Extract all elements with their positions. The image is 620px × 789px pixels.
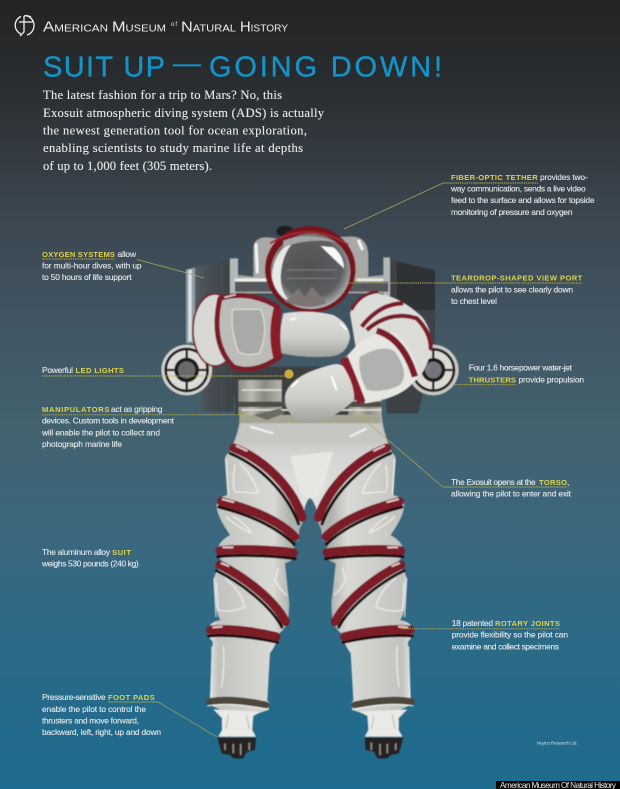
left outer sphere — [193, 294, 237, 366]
callout: fiber-optic tether: monitoring of pressure and oxygen — [451, 207, 573, 217]
belly — [238, 423, 383, 443]
callout: foot pads: Pressure-sensitive — [42, 692, 106, 702]
helmet collar — [265, 226, 356, 313]
left shoulder sphere — [217, 296, 280, 369]
waist bands — [235, 367, 382, 415]
callout: teardrop view port: to chest level — [451, 296, 497, 306]
intro text — [43, 88, 325, 173]
right arm — [253, 292, 431, 423]
helmet — [265, 226, 356, 313]
crotch panel — [290, 452, 333, 497]
right tank — [383, 257, 435, 413]
title — [43, 52, 442, 84]
leader: view port — [345, 282, 582, 284]
callout: fiber-optic tether: provides two- — [540, 172, 588, 182]
callout: teardrop view port: allows the pilot to see clearly down — [451, 284, 573, 294]
intro text: the newest generation tool for ocean exploration, — [43, 124, 307, 138]
callout: oxygen systems: for multi-hour dives, with up — [42, 261, 142, 271]
callout: torso: allowing the pilot to enter and exit — [451, 489, 572, 499]
right upper capsule — [350, 293, 431, 392]
callout: foot pads: FOOT PADS — [108, 693, 155, 702]
callout: oxygen systems — [42, 249, 142, 282]
suit upper body — [161, 226, 459, 443]
callout: torso: TORSO — [539, 478, 567, 487]
glass reflections — [272, 241, 295, 302]
underline: fiber — [451, 182, 538, 184]
callout: suit — [41, 547, 139, 569]
museum name: Natural — [181, 20, 236, 36]
callout: oxygen systems: OXYGEN SYSTEMS — [42, 250, 115, 259]
right thruster housing — [408, 345, 459, 395]
leader: foot pads — [108, 702, 217, 737]
left tank — [185, 257, 238, 412]
leader: torso — [353, 410, 567, 487]
callout: LED lights — [42, 365, 124, 375]
left leg — [207, 446, 305, 758]
callout: foot pads: enable the pilot to control the — [42, 704, 146, 714]
leg shell — [207, 452, 305, 737]
pelvis — [230, 415, 392, 515]
callout: foot pads — [42, 692, 161, 737]
callout: foot pads: backward, left, right, up and down — [42, 727, 161, 737]
leader: fiber-optic tether — [344, 183, 451, 229]
museum name: of — [171, 22, 177, 28]
rear frame — [238, 237, 383, 293]
ankle ring — [209, 700, 266, 705]
museum name — [43, 20, 288, 36]
leader: oxygen — [137, 260, 204, 278]
left forearm — [280, 312, 350, 357]
exosuit illustration — [161, 226, 459, 758]
callout: torso — [451, 477, 572, 499]
right elbow ring — [344, 358, 362, 403]
callout: manipulators: will enable the pilot to collect and — [41, 427, 160, 437]
callout: rotary joints: provide flexibility so the pilot can — [452, 630, 568, 640]
callout: rotary joints: ROTARY JOINTS — [495, 619, 560, 628]
leader lines — [42, 183, 582, 737]
left elbow ring — [275, 308, 278, 357]
callout: fiber-optic tether: feed to the surface and allows for topside — [451, 195, 595, 205]
leader: LED — [42, 375, 289, 377]
callout: thrusters — [469, 363, 584, 385]
callout: teardrop view port: TEARDROP-SHAPED VIEW PORT — [451, 274, 583, 283]
oxygen tanks — [185, 257, 435, 413]
ankle — [213, 709, 262, 737]
credit: Nuytco Research Ltd. — [537, 741, 578, 746]
intro text: The latest fashion for a trip to Mars? No, this — [43, 88, 282, 102]
intro text: Exosuit atmospheric diving system (ADS) is actually — [43, 106, 325, 120]
museum logo — [15, 16, 288, 36]
callout: manipulators — [41, 404, 175, 449]
thruster housing — [161, 345, 212, 395]
callout: LED lights: Powerful — [42, 365, 73, 375]
view port — [271, 234, 350, 309]
intro text: enabling scientists to study marine life at depths — [43, 141, 303, 155]
callout: fiber-optic tether — [450, 172, 595, 217]
joint highlights — [213, 446, 247, 627]
right forearm capsule — [343, 333, 418, 403]
intro text: of up to 1,000 feet (305 meters). — [43, 159, 212, 173]
museum name: American — [43, 20, 108, 36]
manipulator fingers — [253, 408, 285, 420]
tether connector — [276, 226, 294, 237]
callout: thrusters: provide propulsion — [518, 375, 584, 385]
callout: LED lights: LED LIGHTS — [76, 366, 124, 375]
thruster right — [408, 345, 459, 395]
leader: rotary joints — [401, 628, 560, 630]
callout: fiber-optic tether: FIBER-OPTIC TETHER — [451, 173, 538, 182]
icon: museum emblem — [15, 16, 34, 36]
waist — [235, 367, 383, 443]
callout: suit: SUIT — [112, 548, 131, 557]
callout: oxygen systems: allow — [118, 249, 137, 259]
suit legs — [207, 415, 414, 758]
callout: torso: The Exosuit opens at the — [451, 477, 536, 487]
hand — [285, 364, 354, 423]
callout: fiber-optic tether: way communication, sends a live video — [450, 184, 586, 194]
callout: teardrop view port — [451, 274, 583, 306]
museum name: Museum — [112, 20, 166, 36]
title: GOING DOWN! — [209, 52, 442, 84]
callout: rotary joints: 18 patented — [452, 618, 493, 628]
callout: torso: , — [567, 477, 569, 487]
callout: thrusters: THRUSTERS — [469, 376, 516, 385]
left arm — [193, 294, 350, 369]
callout: manipulators: act as gripping — [111, 404, 163, 414]
leader: thrusters — [455, 384, 516, 386]
rotary joints — [230, 453, 299, 524]
led marker dot — [284, 369, 294, 379]
museum name: History — [240, 20, 288, 36]
callout: thrusters: Four 1.6 horsepower water-jet — [469, 363, 573, 373]
right leg — [316, 446, 414, 758]
callout: suit: The aluminum alloy — [42, 547, 111, 557]
callout: rotary joints — [452, 618, 568, 652]
callout: rotary joints: examine and collect specimens — [452, 642, 559, 652]
leader: manipulators — [42, 414, 254, 416]
title: SUIT UP — [43, 52, 165, 84]
callout: oxygen systems: to 50 hours of life support — [42, 272, 132, 282]
callout: manipulators: MANIPULATORS — [42, 405, 110, 414]
thruster left — [161, 345, 212, 395]
panel highlights — [217, 463, 287, 687]
foot pad — [217, 737, 256, 758]
callout: suit: weighs 530 pounds (240 kg) — [41, 559, 139, 569]
callout: foot pads: thrusters and move forward, — [42, 716, 139, 726]
callout: manipulators: photograph marine life — [42, 439, 122, 449]
callout: manipulators: devices. Custom tools in development — [42, 416, 175, 426]
underline: oxygen — [42, 258, 115, 260]
